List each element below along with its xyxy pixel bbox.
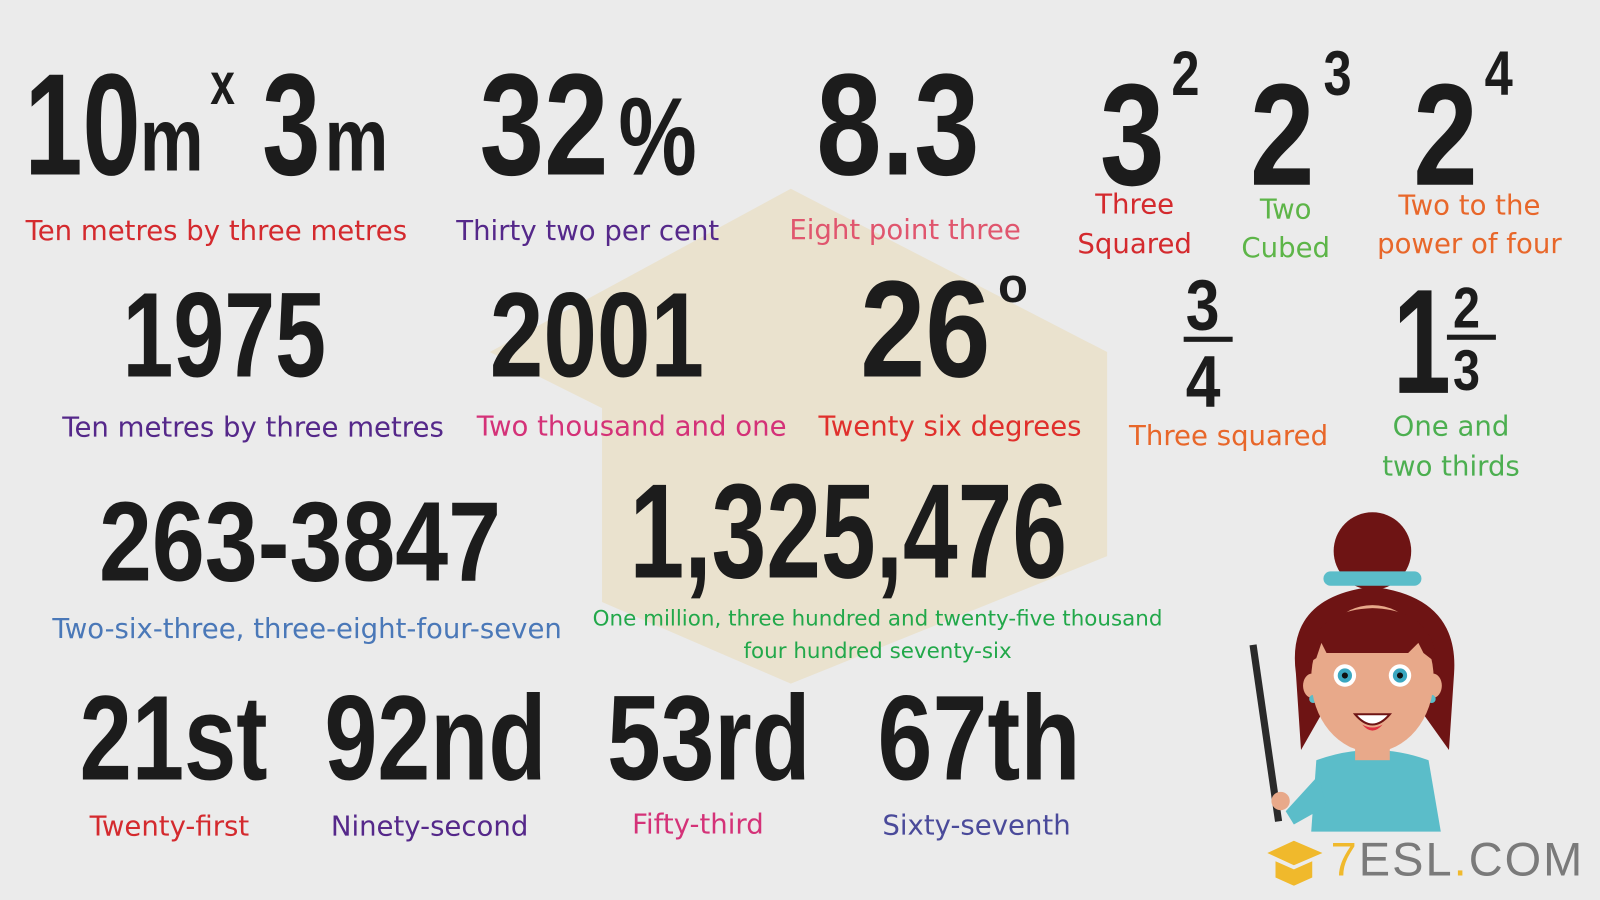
label: phone: Two-six-three, three-eight-four-seven <box>52 613 562 645</box>
label: ten metres: Ten metres by three metres <box>26 215 407 247</box>
number: 10m x 3m: m <box>140 89 204 190</box>
number: 10m x 3m: x <box>210 51 235 117</box>
superscript 2: 2 <box>1171 39 1200 109</box>
number: 2 cubed: 2 <box>1250 54 1314 216</box>
label: twenty six degrees: Twenty six degrees <box>818 411 1082 443</box>
label: two to the power of four <box>1377 190 1562 260</box>
label: thirty two per cent: Thirty two per cent <box>456 215 719 247</box>
label: two thousand and one: Two thousand and one <box>477 411 787 443</box>
number: 2 to the fourth: 2 <box>1413 54 1478 216</box>
mixed number 1 2/3: 2 <box>1453 276 1480 340</box>
label: two to the power of four: Two to the <box>1398 190 1540 221</box>
label: twenty-first: Twenty-first <box>90 811 249 843</box>
number: 10m x 3m <box>24 44 388 206</box>
fraction 3/4: 4 <box>1186 342 1220 423</box>
number: 1975: 1975 <box>122 268 326 403</box>
label: three squared (fraction): Three squared <box>1129 420 1328 452</box>
label: two cubed: Cubed <box>1241 233 1330 264</box>
label: ninety-second: Ninety-second <box>331 811 528 843</box>
label: 1975: Ten metres by three metres <box>62 412 444 444</box>
number: 21st: 21st <box>80 671 268 806</box>
logo: 7ESL.COM: 7ESL.COM <box>1331 833 1584 886</box>
label: three squared <box>1077 189 1192 260</box>
label: one and two thirds: One and <box>1393 411 1509 443</box>
label: three squared: Three <box>1095 189 1174 220</box>
logo: 7ESL.COM <box>1250 512 1584 886</box>
label: one million ... <box>593 606 1162 663</box>
label: three squared: Squared <box>1077 229 1192 260</box>
number: 1,325,476: 1,325,476 <box>630 456 1067 606</box>
number: phone: 263-3847 <box>99 479 501 605</box>
number: 26 degrees: 26 <box>860 252 990 406</box>
label: eight point three: Eight point three <box>789 214 1021 246</box>
number: 10m x 3m: m <box>324 89 388 190</box>
superscript 4: 4 <box>1485 39 1513 109</box>
label: fifty-third: Fifty-third <box>632 809 764 841</box>
number: 53rd: 53rd <box>607 671 811 806</box>
mixed number 1 2/3 <box>1393 258 1496 424</box>
fraction 3/4: 3 <box>1186 265 1219 345</box>
number: 8.3: 8.3 <box>816 44 979 206</box>
label: one and two thirds <box>1382 411 1520 483</box>
teacher illustration <box>1250 512 1454 832</box>
label: sixty-seventh: Sixty-seventh <box>882 810 1071 842</box>
fraction 3/4 <box>1184 265 1233 423</box>
label: two to the power of four: power of four <box>1377 229 1562 260</box>
number: 10m x 3m: 3 <box>262 44 320 206</box>
mixed number 1 2/3: 1 <box>1393 258 1451 424</box>
mixed number 1 2/3: 3 <box>1453 338 1480 402</box>
label: two cubed: Two <box>1260 194 1312 226</box>
number: 32%: 32% <box>480 44 697 206</box>
superscript 3: 3 <box>1323 39 1352 109</box>
number: 3 squared: 3 <box>1100 54 1164 216</box>
degree symbol: o <box>998 259 1028 313</box>
label: one million ...: four hundred seventy-six <box>743 639 1012 663</box>
number: 67th: 67th <box>878 671 1081 806</box>
number: 10m x 3m: 10 <box>24 44 141 206</box>
number: 2001: 2001 <box>490 268 704 403</box>
label: two cubed <box>1241 194 1330 264</box>
number: 92nd: 92nd <box>324 671 547 806</box>
label: one million ...: One million, three hundred and twenty-five thousand <box>593 606 1162 631</box>
label: one and two thirds: two thirds <box>1382 451 1520 483</box>
